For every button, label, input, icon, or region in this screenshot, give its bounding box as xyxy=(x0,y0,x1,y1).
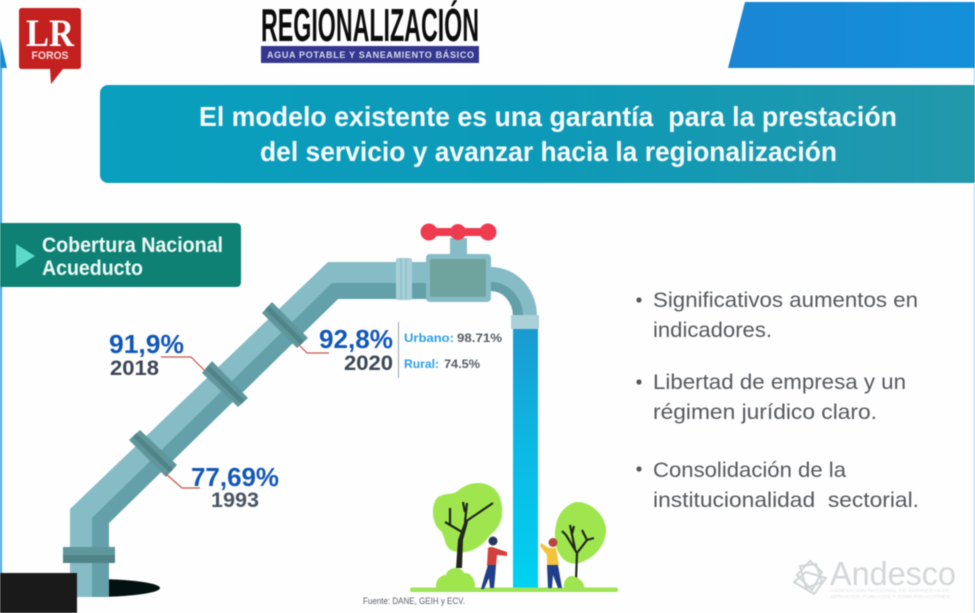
callout: 2020: 92,8% xyxy=(319,324,393,354)
top right blue shape xyxy=(728,2,975,68)
bullet 1 xyxy=(636,288,918,342)
flange: 2018 xyxy=(202,361,248,407)
logo: Andesco: SERVICIOS PÚBLICOS Y COMUNICACIONES xyxy=(830,593,950,599)
logo: Andesco xyxy=(794,555,956,599)
bullet 3 xyxy=(636,458,919,512)
urban and rural split: Urbano: xyxy=(404,333,454,345)
logo: Andesco: Andesco xyxy=(830,555,956,592)
water stream xyxy=(513,329,538,589)
flange: 2020 xyxy=(262,302,308,348)
urban and rural split: 98.71% xyxy=(457,333,502,345)
urban and rural split xyxy=(404,333,502,371)
title banner: del servicio y avanzar hacia la regionalización xyxy=(260,136,837,167)
callout: 2018 xyxy=(109,329,205,380)
urban and rural split: 74.5% xyxy=(444,359,480,371)
bullet 2: régimen jurídico claro. xyxy=(653,400,877,424)
flange: 1993 xyxy=(129,430,177,477)
dark corner box xyxy=(0,573,77,613)
coupling xyxy=(396,258,412,300)
person left xyxy=(481,536,507,589)
person right xyxy=(540,538,562,588)
callout: 1993 xyxy=(166,462,279,512)
bullet 3: Consolidación de la xyxy=(653,458,846,482)
callout: 1993: 1993 xyxy=(211,489,259,512)
urban and rural split: Rural: xyxy=(404,359,439,371)
left edge accent xyxy=(0,38,7,613)
faucet body xyxy=(426,254,491,302)
panel label: Cobertura Nacional Acueducto xyxy=(0,223,241,287)
bullet 2 xyxy=(636,370,906,424)
left tree xyxy=(433,483,502,588)
callout: 2018: 91,9% xyxy=(109,329,184,359)
logo: LR Foros: LR xyxy=(26,12,75,55)
ground xyxy=(410,588,618,592)
callout: 1993: 77,69% xyxy=(191,462,279,492)
title banner: El modelo existente es una garantía para la prestación xyxy=(199,101,897,132)
title banner xyxy=(100,85,975,183)
icon: play triangle xyxy=(16,244,35,268)
logo: Regionalización xyxy=(261,0,479,63)
illustration: trees and people xyxy=(410,483,618,592)
logo: Regionalización: REGIONALIZACIÓN xyxy=(261,0,479,51)
logo: Andesco: ASOCIACIÓN NACIONAL DE EMPRESAS DE xyxy=(830,587,950,593)
right edge accent xyxy=(974,68,975,613)
right tree xyxy=(555,502,606,588)
panel label: Cobertura Nacional Acueducto: Acueducto xyxy=(42,257,143,280)
bullet 3: institucionalidad sectorial. xyxy=(653,488,919,512)
flange: base xyxy=(63,547,115,563)
source note: Fuente: DANE, GEIH y ECV. xyxy=(363,596,465,606)
bullet 2: Libertad de empresa y un xyxy=(653,370,906,394)
panel label: Cobertura Nacional Acueducto: Cobertura Nacional xyxy=(42,234,223,257)
callout: 2018: 2018 xyxy=(110,357,159,380)
illustration: water pipe xyxy=(63,224,539,597)
bullet 1: indicadores. xyxy=(653,318,772,342)
logo: Regionalización: AGUA POTABLE Y SANEAMIENTO BÁSICO xyxy=(267,50,474,60)
faucet spout xyxy=(488,267,539,329)
callout: 2020 xyxy=(299,322,502,378)
bullet 1: Significativos aumentos en xyxy=(653,288,918,312)
callout: 2020: 2020 xyxy=(344,352,393,375)
faucet stem xyxy=(450,238,467,256)
bullet list xyxy=(636,288,919,512)
logo: LR Foros xyxy=(19,8,81,84)
logo: LR Foros: FOROS xyxy=(32,50,68,62)
faucet handle xyxy=(420,224,496,240)
hole in the ground xyxy=(24,579,160,597)
